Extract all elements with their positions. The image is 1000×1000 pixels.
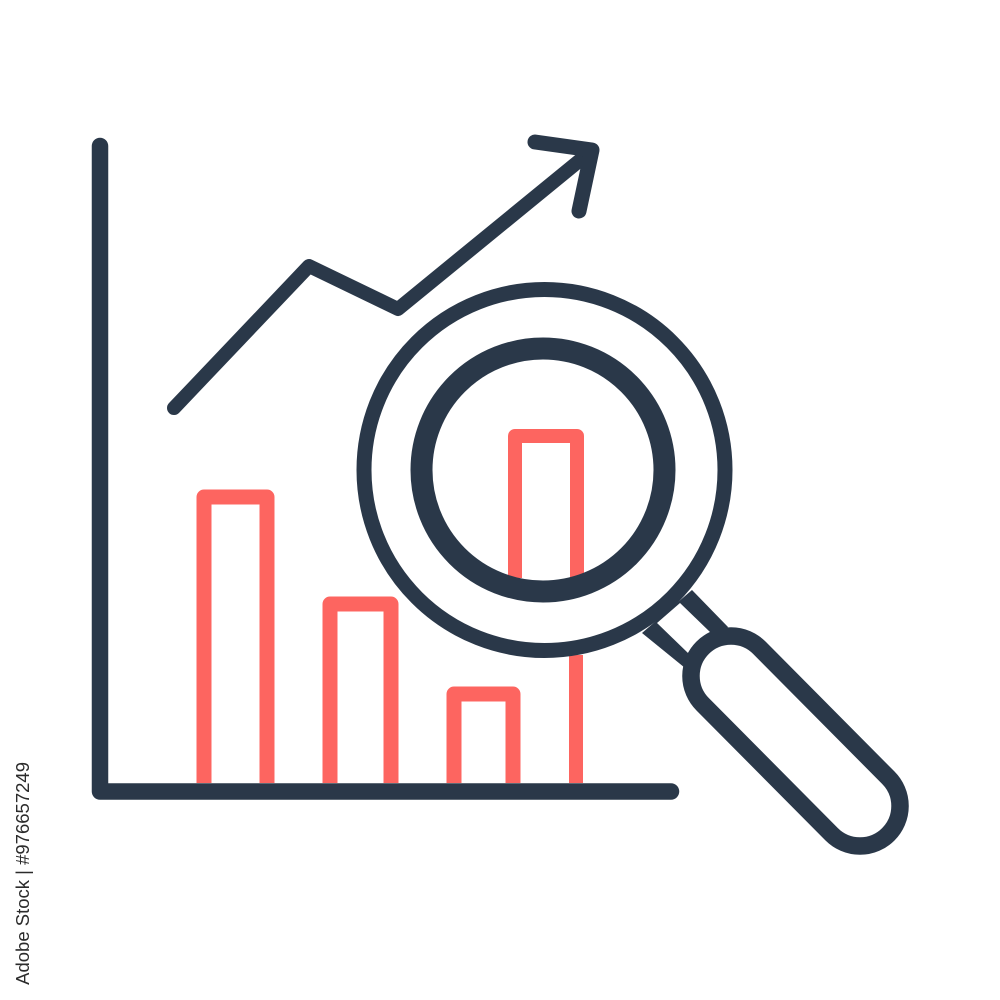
inner lens ring [422,348,664,592]
side stock id text: Adobe Stock | #976657249 [12,762,33,985]
handle grip [691,636,900,846]
neck window [657,603,710,653]
bar 1 [204,497,267,783]
bar 2 [330,604,391,783]
bar 4 [515,436,577,783]
outer lens ring [364,290,725,650]
magnifying glass [364,290,900,846]
handle neck [642,590,728,672]
axes [100,146,671,792]
bar 3 [454,694,513,783]
trend arrow [174,142,592,408]
